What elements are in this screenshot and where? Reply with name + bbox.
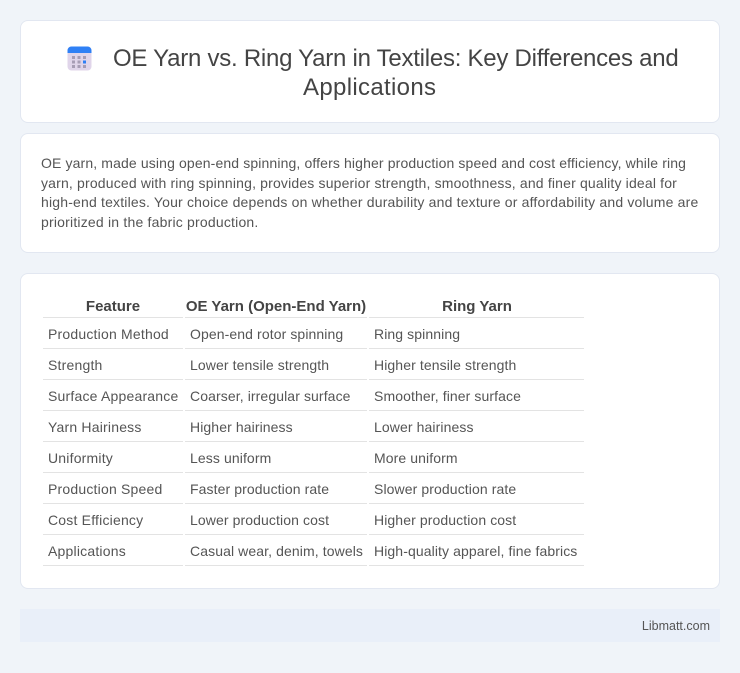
row: surface appearance: Coarser, irregular surface xyxy=(190,388,351,404)
intro paragraph: prioritized in the fabric production. xyxy=(41,214,259,230)
row: cost efficiency: Higher production cost xyxy=(374,512,516,528)
row: yarn hairiness xyxy=(43,419,584,442)
header row: Ring Yarn xyxy=(442,298,512,315)
row: production method: Open-end rotor spinning xyxy=(190,326,343,342)
intro paragraph xyxy=(41,155,698,230)
row: strength: Lower tensile strength xyxy=(190,357,329,373)
comparison table xyxy=(43,298,584,566)
row: yarn hairiness: Lower hairiness xyxy=(374,419,474,435)
row: strength: Higher tensile strength xyxy=(374,357,516,373)
intro paragraph: high-end textiles. Your choice depends on whether durability and texture or affordability and volume are xyxy=(41,194,698,210)
row: applications xyxy=(43,543,584,566)
row: surface appearance: Smoother, finer surface xyxy=(374,388,521,404)
row: production speed xyxy=(43,481,584,504)
icon: calendar xyxy=(68,46,92,70)
row: uniformity: More uniform xyxy=(374,450,458,466)
row: uniformity xyxy=(43,450,584,473)
row: production method: Ring spinning xyxy=(374,326,460,342)
intro paragraph: yarn, produced with ring spinning, provides superior strength, smoothness, and finer quality ideal for xyxy=(41,174,677,190)
row: uniformity: Uniformity xyxy=(48,450,113,466)
header row: OE Yarn (Open-End Yarn) xyxy=(186,298,366,315)
row: applications: High-quality apparel, fine fabrics xyxy=(374,543,577,559)
title xyxy=(113,45,678,101)
comparison table panel xyxy=(20,273,720,589)
row: production method: Production Method xyxy=(48,326,169,342)
row: uniformity: Less uniform xyxy=(190,450,271,466)
row: applications: Applications xyxy=(48,543,126,559)
intro paragraph: OE yarn, made using open-end spinning, offers higher production speed and cost efficiency, while ring xyxy=(41,155,686,171)
title: Applications xyxy=(303,74,436,101)
row: production speed: Faster production rate xyxy=(190,481,329,497)
row: surface appearance: Surface Appearance xyxy=(48,388,178,404)
row: strength xyxy=(43,357,584,380)
header row: Feature xyxy=(86,298,140,315)
row: production speed: Production Speed xyxy=(48,481,163,497)
row: cost efficiency: Cost Efficiency xyxy=(48,512,143,528)
row: strength: Strength xyxy=(48,357,103,373)
row: applications: Casual wear, denim, towels xyxy=(190,543,363,559)
row: production speed: Slower production rate xyxy=(374,481,516,497)
header panel xyxy=(20,20,720,123)
row: surface appearance xyxy=(43,388,584,411)
row: yarn hairiness: Higher hairiness xyxy=(190,419,293,435)
footer bar xyxy=(20,609,720,642)
row: cost efficiency xyxy=(43,512,584,535)
header row xyxy=(43,298,584,318)
row: yarn hairiness: Yarn Hairiness xyxy=(48,419,142,435)
footer brand: Libmatt.com xyxy=(642,619,710,633)
title: OE Yarn vs. Ring Yarn in Textiles: Key Differences and xyxy=(113,45,678,72)
row: cost efficiency: Lower production cost xyxy=(190,512,329,528)
intro text panel xyxy=(20,133,720,253)
row: production method xyxy=(43,326,584,349)
